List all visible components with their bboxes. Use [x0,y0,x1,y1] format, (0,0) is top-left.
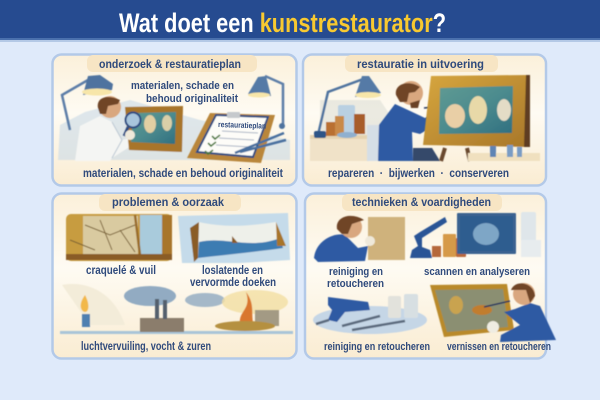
heading ribbon: restauratie: restauratie in uitvoering [357,57,484,71]
text: loslatende en vervormde doeken: vervormde doeken [190,277,276,289]
illustration: cleaning restorer [314,216,405,262]
heading ribbon: technieken: technieken & voardigheden [352,195,491,209]
header banner [0,0,600,42]
heading ribbon: problemen: problemen & oorzaak [112,195,224,209]
illustration: deformed canvas [178,213,290,263]
panel: restauratie in uitvoering [303,54,546,186]
text: materialen intro: behoud originaliteit [146,93,238,105]
illustration: desk, lamp and jars [310,76,420,161]
title: Wat doet een kunstrestaurator? [119,8,446,38]
illustration: varnishing restorer [430,283,556,342]
icon: left lamp [62,75,113,130]
text: reiniging en retoucheren top [327,266,384,290]
text: vernissen en retoucheren: vernissen en retoucheren [447,341,551,353]
text: luchtvervuiling: luchtvervuiling, vocht & zuren [81,341,211,353]
illustration: craquele painting [66,214,172,261]
panel: onderzoek en restauratieplan [52,54,296,186]
panel: problemen en oorzaak [52,194,296,358]
illustration: restauratieplan clipboard [187,112,286,163]
label: restauratieplan on clipboard: restauratieplan [218,120,266,131]
text: reiniging en retoucheren top: reiniging en [329,266,383,278]
illustration: framed painting on easel [423,75,540,161]
panel: technieken en vaardigheden [305,194,556,358]
text: loslatende en vervormde doeken: loslatende en [202,265,263,277]
text: materialen intro [131,80,238,105]
illustration: restorer painting [367,81,455,161]
text: scannen en analyseren: scannen en analyseren [424,266,530,278]
illustration: pollution, damp and acids [60,284,293,334]
text: repareren bijwerken conserveren: repareren · bijwerken · conserveren [328,168,509,180]
text: reiniging en retoucheren bottom: reiniging en retoucheren [324,341,430,353]
illustration: microscope, bottles and monitor [410,212,541,258]
icon: right lamp [248,76,285,129]
text: loslatende en vervormde doeken [190,265,276,289]
text: materialen intro: materialen, schade en [131,80,234,92]
text: craquele en vuil: craquelé & vuil [86,265,156,277]
text: reiniging en retoucheren top: retoucheren [327,278,384,290]
heading ribbon: onderzoek: onderzoek & restauratieplan [99,57,241,71]
text: materialen caption: materialen, schade en behoud originaliteit [83,168,283,180]
illustration: tools, heat gun and jars [313,294,427,334]
illustration: researcher with magnifier [58,96,290,161]
